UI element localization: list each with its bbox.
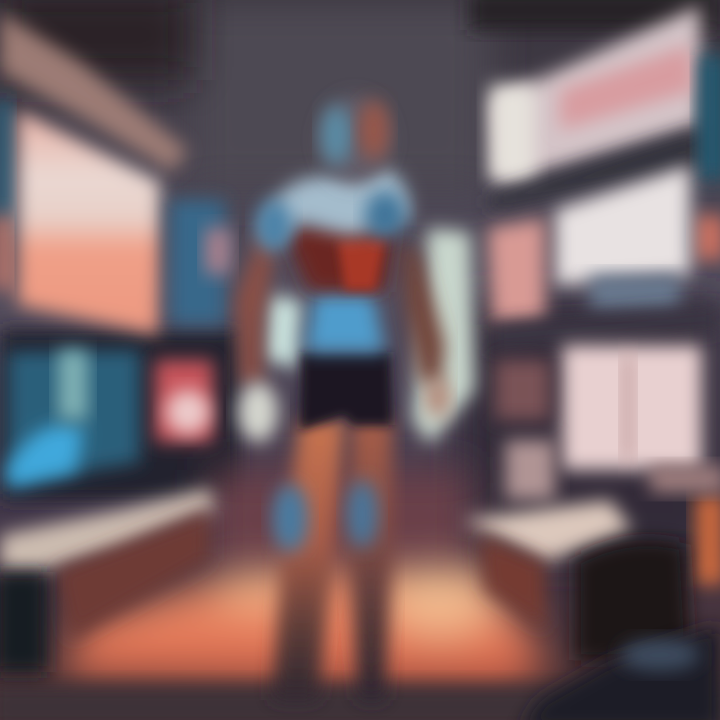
floor foreground strip bbox=[0, 684, 720, 720]
dark cabinet bbox=[0, 572, 47, 672]
left arm bbox=[236, 228, 276, 385]
right wall shelving bbox=[462, 5, 720, 720]
left knee guard bbox=[272, 484, 308, 552]
top shelf dark bbox=[490, 130, 700, 210]
right hand bbox=[426, 378, 450, 418]
figure bbox=[236, 96, 475, 700]
red and white display bbox=[155, 360, 213, 442]
left wall shelving bbox=[0, 12, 231, 672]
right edge panel bbox=[695, 215, 720, 260]
chest red bbox=[282, 218, 395, 292]
left leg bbox=[272, 420, 345, 700]
shoulders bbox=[262, 168, 410, 245]
top poster bbox=[492, 5, 700, 185]
blue poster group bbox=[170, 200, 225, 325]
left hand bbox=[238, 382, 278, 442]
right arm bbox=[402, 240, 445, 390]
small items bbox=[495, 360, 550, 420]
blue waist bbox=[305, 290, 385, 352]
lower poster bbox=[562, 345, 702, 470]
right knee guard bbox=[346, 480, 378, 548]
left edge blue strip bbox=[0, 100, 12, 220]
light cloak right bbox=[412, 228, 475, 445]
shelf band bbox=[490, 305, 720, 350]
desk bbox=[462, 500, 632, 562]
head bbox=[320, 96, 390, 184]
right leg bbox=[350, 420, 392, 700]
dark foreground bbox=[520, 625, 720, 720]
large poster bbox=[18, 110, 160, 335]
top beam bbox=[0, 12, 188, 172]
light cloak left bbox=[264, 295, 302, 368]
dark chair bbox=[575, 540, 690, 661]
floor glow bbox=[60, 565, 550, 695]
counter top bbox=[0, 488, 215, 572]
blue edge bbox=[698, 55, 720, 180]
middle poster bbox=[555, 165, 690, 285]
shorts bbox=[300, 352, 392, 430]
lower screen bbox=[8, 350, 140, 485]
salmon edge strip bbox=[0, 215, 10, 290]
right orange block bbox=[695, 495, 720, 585]
